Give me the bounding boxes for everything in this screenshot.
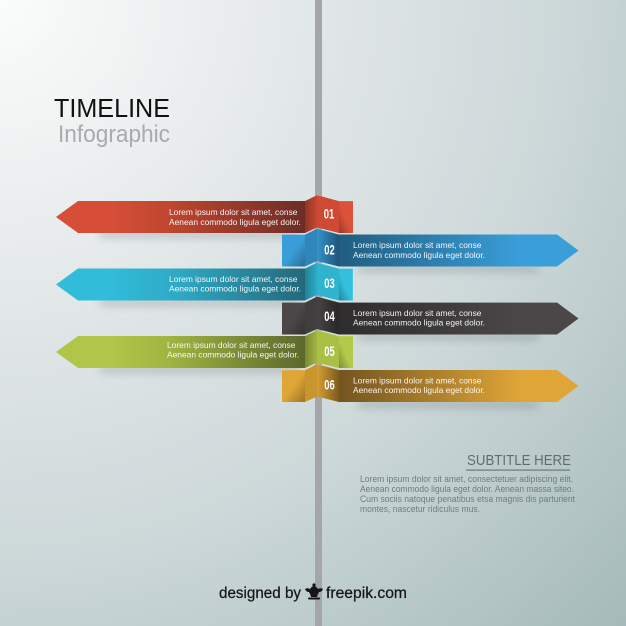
description: Aenean commodo ligula eget dolor.	[169, 217, 301, 227]
arrow bar	[339, 370, 578, 402]
description	[353, 376, 485, 395]
fold panels	[282, 296, 557, 334]
title: TIMELINE	[54, 95, 170, 123]
icon: freepik logo	[305, 583, 323, 600]
description: Lorem ipsum dolor sit amet, conse	[353, 308, 482, 318]
body text: Aenean commodo ligula eget dolor. Aenean massa siteo.	[360, 484, 574, 494]
arrow bar	[339, 302, 578, 334]
number: 06	[324, 376, 335, 392]
description: Aenean commodo ligula eget dolor.	[353, 250, 485, 260]
body text: montes, nascetur ridiculus mus.	[360, 504, 480, 514]
timeline item 03	[56, 262, 353, 300]
body text: Cum sociis natoque penatibus etsa magnis dis parturient	[360, 494, 575, 504]
description: Aenean commodo ligula eget dolor.	[167, 350, 299, 360]
description: Lorem ipsum dolor sit amet, conse	[353, 240, 482, 250]
description	[169, 207, 301, 227]
description	[353, 308, 485, 328]
timeline item 04	[282, 296, 578, 334]
description: Aenean commodo ligula eget dolor.	[353, 318, 485, 328]
description: Lorem ipsum dolor sit amet, conse	[353, 376, 482, 386]
body text	[360, 474, 575, 514]
fold panels	[282, 228, 339, 266]
arrow bar	[56, 268, 305, 300]
description: Aenean commodo ligula eget dolor.	[169, 284, 301, 294]
subtitle heading: SUBTITLE HERE	[467, 452, 571, 469]
footer credit	[219, 583, 407, 602]
timeline item 05	[56, 330, 353, 368]
fold panels	[305, 195, 353, 233]
number: 03	[324, 275, 335, 291]
bar shadows	[100, 232, 538, 407]
timeline item 02	[282, 228, 578, 266]
description: Lorem ipsum dolor sit amet, conse	[169, 207, 298, 217]
fold panels	[305, 262, 353, 300]
arrow bar	[56, 201, 305, 233]
number: 04	[324, 308, 335, 324]
timeline item 01	[56, 195, 353, 233]
description	[167, 340, 299, 360]
timeline item 06	[282, 364, 578, 402]
body text: Lorem ipsum dolor sit amet, consectetuer adipiscing elit.	[360, 474, 573, 484]
timeline pole	[315, 0, 322, 626]
description	[353, 240, 485, 260]
fold panels	[305, 330, 353, 368]
footer credit: designed by	[219, 585, 301, 602]
arrow bar	[56, 336, 305, 368]
arrow bar	[339, 234, 578, 266]
number: 02	[324, 242, 335, 258]
description: Aenean commodo ligula eget dolor.	[353, 385, 485, 395]
number: 01	[324, 206, 334, 222]
description	[169, 274, 301, 294]
subtitle: infographic: Infographic	[58, 121, 170, 148]
description: Lorem ipsum dolor sit amet, conse	[169, 274, 298, 284]
footer credit: freepik.com	[326, 585, 407, 602]
number: 05	[324, 343, 335, 359]
description: Lorem ipsum dolor sit amet, conse	[167, 340, 296, 350]
fold panels	[282, 364, 339, 402]
